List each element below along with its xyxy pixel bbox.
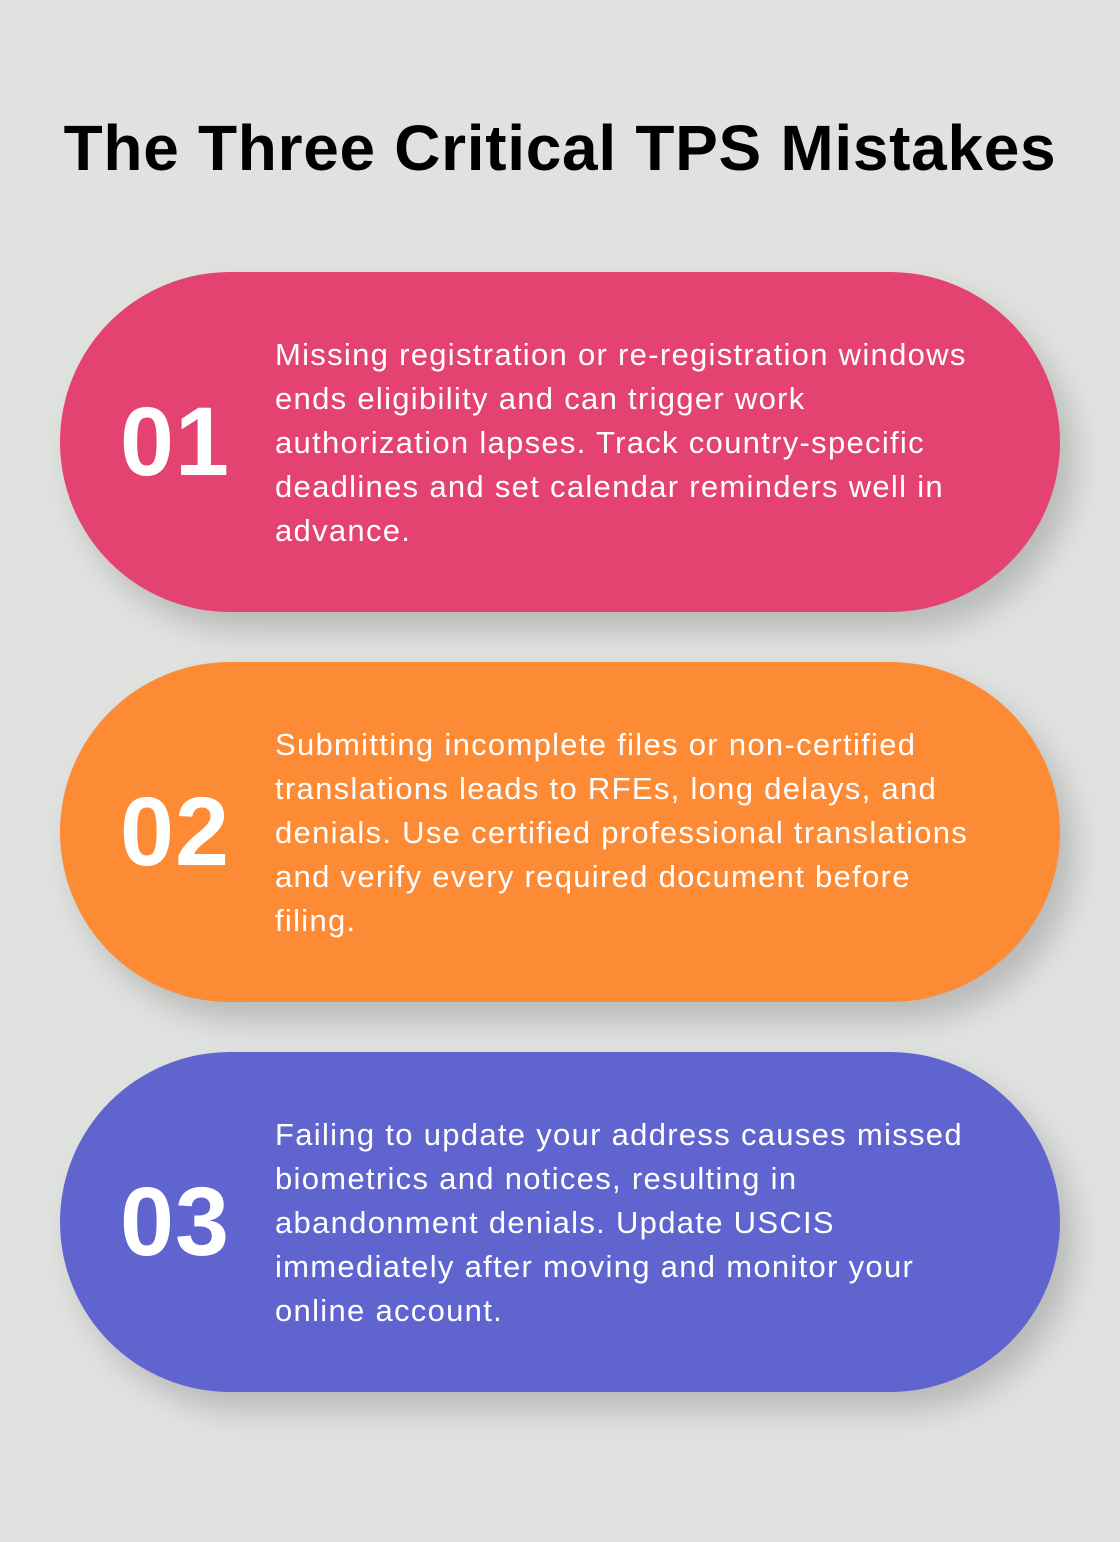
text 01: deadlines and set calendar reminders well in xyxy=(275,469,944,504)
text 03: immediately after moving and monitor your xyxy=(275,1249,914,1284)
text 02 xyxy=(275,727,968,938)
title: The Three Critical TPS Mistakes xyxy=(64,112,1056,184)
text 02: Submitting incomplete files or non-certified xyxy=(275,727,916,762)
text 03: Failing to update your address causes missed xyxy=(275,1117,963,1152)
number 03: 03 xyxy=(120,1167,230,1276)
number 02: 02 xyxy=(120,777,230,886)
text 01: advance. xyxy=(275,513,411,548)
text 03: abandonment denials. Update USCIS xyxy=(275,1205,835,1240)
number 01: 01 xyxy=(120,387,230,496)
text 02: and verify every required document before xyxy=(275,859,911,894)
text 02: translations leads to RFEs, long delays, and xyxy=(275,771,937,806)
panel: mistake 03 xyxy=(60,1052,1060,1392)
text 03: biometrics and notices, resulting in xyxy=(275,1161,797,1196)
text 03 xyxy=(275,1117,963,1328)
text 01 xyxy=(275,337,967,548)
text 02: filing. xyxy=(275,903,356,938)
text 01: ends eligibility and can trigger work xyxy=(275,381,806,416)
text 01: authorization lapses. Track country-specific xyxy=(275,425,925,460)
text 01: Missing registration or re-registration windows xyxy=(275,337,967,372)
panel: mistake 01 xyxy=(60,272,1060,612)
text 02: denials. Use certified professional translations xyxy=(275,815,968,850)
panel: mistake 02 xyxy=(60,662,1060,1002)
text 03: online account. xyxy=(275,1293,503,1328)
